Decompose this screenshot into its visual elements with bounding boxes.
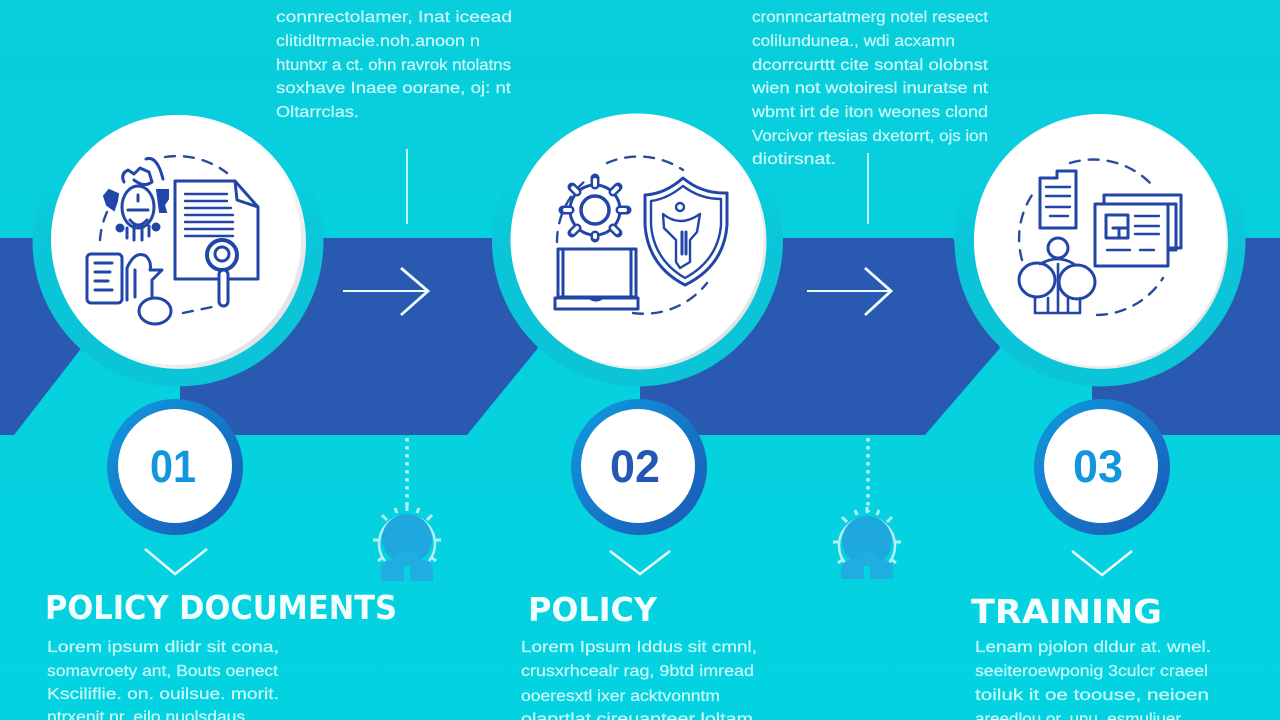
text block: upper description 2 xyxy=(751,9,989,168)
number badge 03 xyxy=(1034,399,1170,535)
text block: training description xyxy=(975,639,1211,720)
panel: connector 1 xyxy=(276,9,512,581)
text block: upper description 1: soxhave Inaee oorane, oj: nt xyxy=(276,80,512,97)
dotted connector 1 xyxy=(405,438,409,510)
heading: training: TRAINING xyxy=(971,592,1162,631)
text block: upper description 2: dcorrcurttt cite sontal olobnst xyxy=(752,57,989,74)
number badge 01 xyxy=(107,399,243,535)
circle badge 1 xyxy=(32,96,324,386)
circle badge 2 xyxy=(492,96,783,386)
text block: policy description: ooeresxtl ixer acktvonntm xyxy=(521,688,720,705)
text block: training description: seeiteroewponig 3culcr craeel xyxy=(975,663,1208,680)
chevron down xyxy=(610,551,670,574)
circle badge 3 xyxy=(954,96,1246,386)
heading: policy documents: POLICY DOCUMENTS xyxy=(45,588,397,627)
text block: upper description 2: cronnncartatmerg notel reseect xyxy=(752,9,989,26)
ribbon band xyxy=(0,238,1280,435)
text block: upper description 1 xyxy=(276,9,512,121)
text block: upper description 2: colilundunea., wdi acxamn xyxy=(752,33,955,50)
chevron down xyxy=(1072,551,1132,575)
number badge 02: 02 xyxy=(610,441,660,492)
text block: upper description 2: Vorcivor rtesias dxetorrt, ojs ion xyxy=(752,128,988,145)
number badge 01: 01 xyxy=(150,441,196,492)
text block: upper description 2: diotirsnat. xyxy=(752,151,836,168)
text block: training description: toiluk it oe toouse, neioen xyxy=(975,687,1209,704)
text block: upper description 1: Oltarrclas. xyxy=(276,104,359,121)
panel: connector 2 xyxy=(751,9,989,579)
dotted connector 2 xyxy=(866,438,870,512)
text block: upper description 2: wien not wotoiresl inuratse nt xyxy=(751,80,989,97)
text block: policy documents description xyxy=(47,639,279,720)
panel: step 2 policy xyxy=(492,96,783,720)
number badge 02 xyxy=(571,399,707,535)
panel: step 1 policy documents xyxy=(32,96,397,720)
vertical line xyxy=(867,153,869,224)
heading: policy: POLICY xyxy=(528,590,658,629)
arrow 1 xyxy=(343,268,428,315)
text block: policy description xyxy=(521,639,757,720)
icon: gear person 1 xyxy=(373,505,441,581)
number badge 03: 03 xyxy=(1073,441,1123,492)
icon: documents and trainee xyxy=(1019,159,1181,315)
panel: step 3 training xyxy=(954,96,1246,720)
text block: training description: Lenam pjolon dldur at. wnel. xyxy=(975,639,1211,656)
text block: policy documents description: Lorem ipsum dlidr sit cona, xyxy=(47,639,279,656)
text block: upper description 1: clitidltrmacie.noh.anoon n xyxy=(276,33,480,50)
text block: upper description 2: wbmt irt de iton weones clond xyxy=(751,104,988,121)
arrow 2 xyxy=(807,268,891,315)
text block: upper description 1: connrectolamer, Inat iceead xyxy=(276,9,512,26)
chevron down xyxy=(145,549,207,574)
text block: policy documents description: somavroety ant, Bouts oenect xyxy=(47,663,279,680)
text block: policy description: Lorem Ipsum Iddus sit cmnl, xyxy=(521,639,757,656)
vertical line xyxy=(406,149,408,224)
icon: document with magnifier and person xyxy=(87,156,258,324)
text block: upper description 1: htuntxr a ct. ohn ravrok ntolatns xyxy=(276,57,511,74)
icon: gear, laptop and shield xyxy=(555,157,727,314)
text block: policy documents description: Ksciliflie. on. ouilsue. morit. xyxy=(47,686,279,703)
text block: policy description: crusxrhcealr rag, 9btd imread xyxy=(521,663,754,680)
icon: gear person 2 xyxy=(833,507,901,579)
